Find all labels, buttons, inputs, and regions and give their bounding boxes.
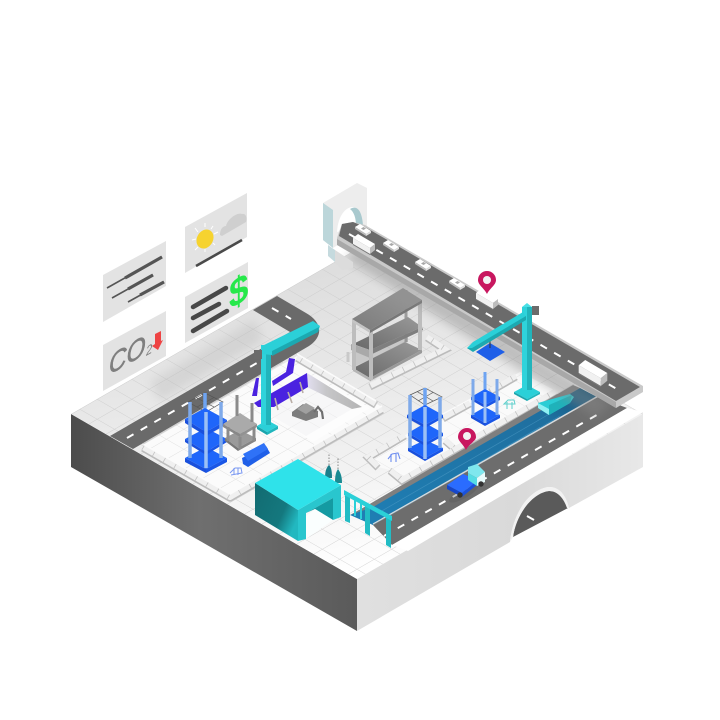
road dashes	[384, 412, 602, 536]
vans	[353, 234, 375, 255]
middle slab	[353, 317, 422, 350]
roof slab	[352, 288, 422, 330]
shadow of elevated road	[345, 248, 612, 418]
platform: right side wall with arch	[357, 412, 643, 631]
gray curb	[350, 385, 580, 515]
road: upper-left curved road	[110, 296, 319, 449]
map pin top	[478, 271, 496, 294]
pillar	[328, 245, 335, 262]
card: CO2 reduction	[103, 311, 166, 391]
blue logs	[242, 443, 270, 467]
opening interior	[306, 498, 333, 520]
crane right: blue pad	[476, 340, 505, 361]
inner back wall	[356, 318, 408, 366]
cars	[355, 224, 371, 236]
lower slab	[353, 342, 422, 378]
wire cage	[410, 388, 442, 405]
crane left	[254, 321, 320, 435]
card shadow on floor	[150, 320, 264, 402]
road surface	[373, 397, 627, 545]
cyan building	[255, 459, 341, 541]
purple retaining wall	[254, 373, 308, 407]
pit: excavation	[252, 358, 370, 442]
floor grid	[71, 249, 643, 579]
card: text lines	[103, 241, 166, 322]
map pin bottom	[458, 428, 476, 450]
gray tower	[223, 395, 257, 451]
fences: right work area	[368, 376, 556, 481]
blue tower 1	[185, 393, 227, 473]
wire icon left	[230, 468, 242, 475]
gray pit wall	[307, 373, 362, 409]
wire icon right	[504, 400, 515, 409]
blue truck	[447, 464, 485, 506]
excavator	[292, 403, 323, 421]
plot: right work area	[368, 372, 556, 480]
fences: centre building pad	[348, 337, 445, 387]
gray concrete building	[351, 288, 423, 381]
wire cage	[188, 393, 223, 412]
portal face	[323, 183, 367, 248]
road dashes	[349, 234, 622, 392]
cyan gate	[344, 490, 392, 548]
river	[350, 388, 597, 525]
blue tower 2	[407, 388, 443, 461]
platform: left side wall	[71, 414, 357, 631]
tunnel portal	[323, 183, 367, 270]
red arrow	[152, 331, 163, 350]
platform: top floor	[71, 249, 643, 579]
crane right	[467, 303, 540, 401]
blue tower 3	[471, 372, 500, 426]
plot: left work area	[143, 356, 382, 495]
wire icon centre	[388, 453, 400, 462]
road: elevated highway	[337, 222, 643, 408]
card: cost	[185, 262, 248, 343]
road dashes	[127, 308, 291, 438]
arch opening	[513, 491, 568, 537]
purple struts	[252, 358, 295, 396]
road: lower road with river	[350, 385, 627, 545]
boat	[538, 394, 574, 415]
card: CO2 reduction: 2	[145, 340, 153, 359]
card: weather	[185, 193, 247, 273]
cone towers	[325, 453, 342, 483]
card: CO2 reduction: CO	[109, 329, 146, 381]
columns	[354, 302, 420, 380]
card: cost: $	[229, 264, 248, 319]
white floor strip	[392, 408, 643, 551]
fences: left work area	[143, 354, 382, 498]
